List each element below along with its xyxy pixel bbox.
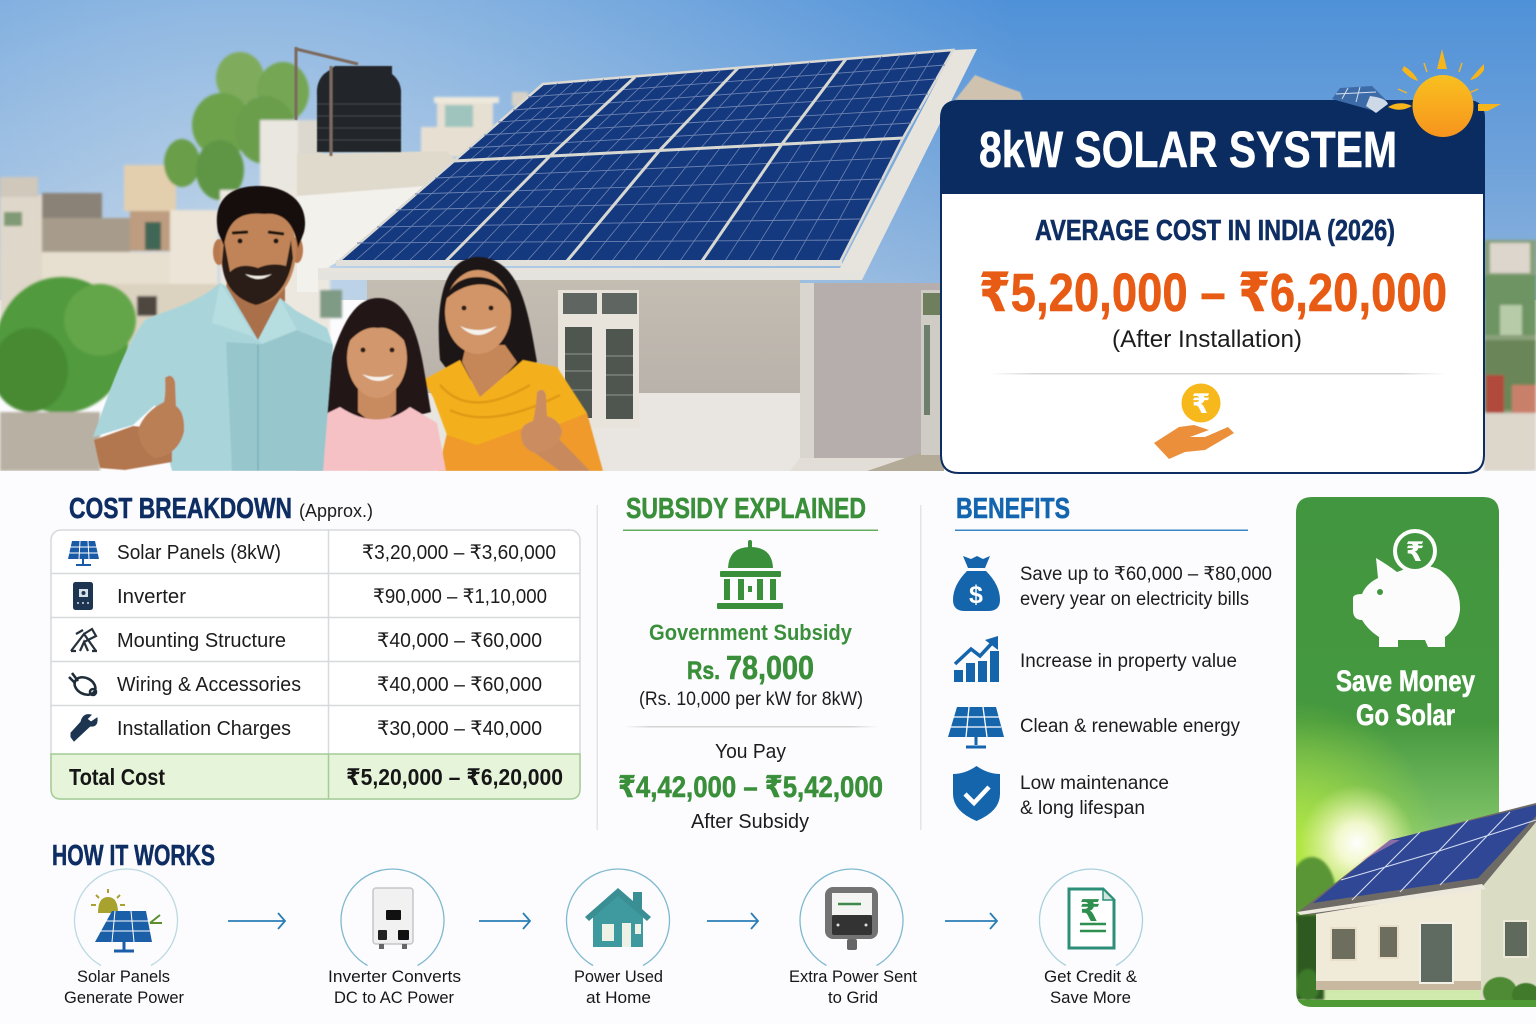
- icon: rupee document: ₹: [1080, 895, 1100, 928]
- arrow 4: [945, 913, 997, 929]
- water tank: [296, 47, 401, 156]
- slogan: Save Money: [1336, 665, 1475, 698]
- row: mounting structure: [71, 629, 542, 652]
- rooftop solar array: [336, 50, 953, 266]
- price note: (After Installation): [1112, 326, 1302, 353]
- icon: government building: [717, 540, 783, 609]
- piggy bank icon with rupee coin: ₹: [1406, 537, 1424, 567]
- subtitle: AVERAGE COST IN INDIA (2026): [1035, 215, 1395, 247]
- hero photo: family in front of solar house: [0, 0, 1536, 473]
- price range: ₹5,20,000 – ₹6,20,000: [979, 263, 1447, 323]
- row: wiring: Wiring & Accessories: [117, 674, 301, 696]
- row: total cost: Total Cost: [69, 764, 165, 790]
- benefit: low maintenance: [953, 766, 1169, 821]
- heading: cost breakdown: COST BREAKDOWN: [69, 493, 292, 525]
- family: woman: [423, 257, 603, 471]
- icon: rising chart: [954, 636, 999, 682]
- arrow 3: [707, 913, 758, 929]
- sky: [0, 0, 1536, 300]
- icon: sun: [1388, 49, 1501, 137]
- icon: money bag: [953, 556, 1000, 611]
- title: 8kW SOLAR SYSTEM: [979, 121, 1397, 178]
- benefit: savings: every year on electricity bills: [1020, 589, 1249, 610]
- step 5: credit: [1040, 869, 1142, 1007]
- piggy bank icon with rupee coin: [1353, 531, 1460, 647]
- eave: [318, 272, 862, 279]
- house window: [558, 290, 639, 428]
- house wall: [367, 280, 944, 473]
- subsidy label: Government Subsidy: [649, 620, 853, 645]
- house photo with solar roof: [1288, 803, 1536, 1007]
- step 5: credit: Get Credit &: [1044, 967, 1138, 986]
- family: man: [93, 186, 333, 471]
- step 1: solar panels: [64, 869, 184, 1007]
- subsidy amount: 78,000: [726, 649, 814, 686]
- arrow 2: [479, 913, 530, 929]
- row: solar panels: [68, 541, 556, 565]
- row: installation: ₹30,000 – ₹40,000: [377, 718, 542, 740]
- step 4: grid meter: Extra Power Sent: [789, 967, 917, 986]
- subsidy amount: [687, 649, 814, 686]
- row: inverter: ₹90,000 – ₹1,10,000: [373, 586, 547, 608]
- icon: rupee coin in hand: [1154, 384, 1234, 459]
- icon: house: [585, 888, 651, 947]
- heading: SUBSIDY EXPLAINED: [626, 493, 866, 525]
- icon: electric meter: [825, 887, 878, 950]
- after subsidy label: After Subsidy: [691, 811, 809, 833]
- green gradient background: [1296, 497, 1499, 1007]
- you pay label: You Pay: [715, 741, 786, 763]
- step 1: solar panels: Solar Panels: [77, 967, 170, 986]
- slogan: [1336, 670, 1476, 726]
- icon: sun and panel: [91, 889, 162, 951]
- benefit: property value: Increase in property value: [1020, 651, 1237, 672]
- you pay amount: ₹4,42,000 – ₹5,42,000: [618, 771, 883, 804]
- background neighbourhood buildings: [0, 52, 528, 385]
- icon: inverter: [373, 888, 413, 949]
- how it works flow: [64, 869, 1142, 1007]
- arrow 1: [228, 913, 285, 929]
- icon: money bag: $: [969, 581, 983, 609]
- slogan: Go Solar: [1356, 699, 1455, 732]
- row: solar panels: Solar Panels (8kW): [117, 542, 281, 564]
- step 2: inverter: Inverter Converts: [328, 967, 461, 986]
- white roof slab: [318, 49, 977, 280]
- heading: how it works: HOW IT WORKS: [52, 840, 215, 872]
- panel: system price card: [940, 49, 1501, 473]
- card header: [940, 100, 1485, 194]
- distant tan rooftop: [955, 75, 1023, 100]
- benefit: property value: [954, 636, 1237, 682]
- cost breakdown table: [51, 530, 580, 799]
- row: installation: Installation Charges: [117, 718, 291, 740]
- row: total cost: ₹5,20,000 – ₹6,20,000: [346, 764, 563, 790]
- left foreground tree and parapet: [0, 277, 136, 471]
- panel: benefits: [948, 493, 1272, 821]
- row: wiring: [69, 673, 542, 698]
- icon: cable: [69, 673, 98, 698]
- row: wiring: ₹40,000 – ₹60,000: [377, 674, 542, 696]
- icon: small rooftop panel: [1332, 86, 1388, 113]
- icon: inverter: [73, 582, 93, 610]
- step 2: inverter: DC to AC Power: [334, 988, 454, 1007]
- step 2: inverter: [328, 869, 461, 1007]
- parapet wall: [297, 151, 456, 196]
- card body: [941, 193, 1484, 473]
- row: mounting structure: ₹40,000 – ₹60,000: [377, 630, 542, 652]
- panel: subsidy explained: [618, 493, 883, 833]
- panel: save money go solar: [1288, 497, 1536, 1007]
- benefit: savings: Save up to ₹60,000 – ₹80,000: [1020, 564, 1272, 585]
- benefit: clean energy: Clean & renewable energy: [1020, 716, 1240, 737]
- step 3: home: [566, 869, 669, 1007]
- heading: cost breakdown: (Approx.): [299, 501, 373, 521]
- white roof slope behind array: [297, 186, 424, 292]
- heading: BENEFITS: [956, 493, 1070, 525]
- step 5: credit: Save More: [1050, 988, 1131, 1007]
- row: installation: [71, 715, 542, 741]
- row: inverter: Inverter: [117, 586, 186, 608]
- icon: rupee coin in hand: ₹: [1192, 389, 1210, 419]
- step 4: grid meter: to Grid: [828, 988, 878, 1007]
- benefit: low maintenance: Low maintenance: [1020, 773, 1169, 794]
- benefit: savings: [953, 556, 1272, 611]
- icon: mounting frame: [71, 629, 97, 651]
- family: girl: [297, 298, 446, 471]
- icon: shield check: [953, 766, 1000, 821]
- icon: solar panel: [68, 541, 99, 565]
- step 1: solar panels: Generate Power: [64, 988, 184, 1007]
- subsidy amount: Rs.: [687, 657, 720, 685]
- right side town view: [1484, 240, 1536, 471]
- step 3: home: Power Used: [574, 967, 663, 986]
- subsidy rate: (Rs. 10,000 per kW for 8kW): [639, 689, 863, 710]
- icon: wrench: [71, 715, 97, 741]
- row: mounting structure: Mounting Structure: [117, 630, 286, 652]
- step 3: home: at Home: [586, 988, 651, 1007]
- benefit: clean energy: [948, 707, 1240, 747]
- row: total cost: [51, 754, 580, 799]
- row: solar panels: ₹3,20,000 – ₹3,60,000: [362, 542, 556, 564]
- step 4: grid meter: [789, 869, 917, 1007]
- benefit: low maintenance: & long lifespan: [1020, 798, 1145, 819]
- row: inverter: [73, 582, 547, 610]
- icon: solar panel: [948, 707, 1004, 747]
